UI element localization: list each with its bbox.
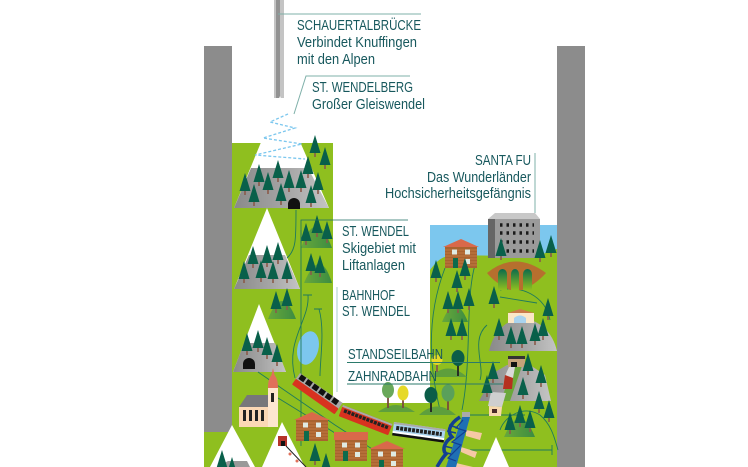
label: St. Wendelberg: ST. WENDELBERG bbox=[312, 79, 413, 96]
hill: trees near St. Wendel bbox=[300, 215, 332, 283]
label: Santa Fu bbox=[385, 152, 535, 213]
hill: small trees bbox=[268, 288, 296, 319]
label: Schauertalbrücke bbox=[278, 14, 421, 68]
trees: forest clearing bbox=[378, 350, 467, 415]
label: Santa Fu: Hochsicherheitsgefängnis bbox=[385, 185, 531, 202]
rail lines bbox=[258, 210, 558, 467]
mountain: funicular station bbox=[479, 353, 554, 422]
mountain: ski area bbox=[234, 208, 300, 289]
pillar: left bbox=[204, 46, 232, 432]
label: Zahnradbahn: ZAHNRADBAHN bbox=[348, 368, 437, 385]
houses bbox=[294, 412, 405, 467]
building: Santa Fu prison bbox=[488, 213, 540, 258]
label: Bahnhof St. Wendel bbox=[337, 287, 410, 392]
lake bbox=[294, 329, 322, 367]
label: Santa Fu: SANTA FU bbox=[475, 152, 531, 169]
bridge column bbox=[274, 0, 284, 98]
mountains: bottom bbox=[210, 422, 509, 467]
label: St. Wendel bbox=[301, 220, 417, 274]
trees: St. Wendelberg bbox=[240, 135, 330, 207]
label: Bahnhof St. Wendel: BAHNHOF bbox=[342, 287, 395, 304]
trees: Santa Fu area bbox=[430, 235, 556, 340]
hill: trees lower right bbox=[504, 405, 536, 437]
label: Bahnhof St. Wendel: ST. WENDEL bbox=[342, 303, 410, 320]
label: Santa Fu: Das Wunderländer bbox=[427, 169, 531, 186]
mountain: tunnel mountain bbox=[233, 304, 286, 372]
bridge: blue arch bridge bbox=[437, 412, 482, 467]
landscape: green base bbox=[204, 143, 557, 467]
label: Schauertalbrücke: SCHAUERTALBRÜCKE bbox=[297, 16, 421, 34]
label: Schauertalbrücke: mit den Alpen bbox=[297, 51, 375, 68]
label: Schauertalbrücke: Verbindet Knuffingen bbox=[297, 34, 417, 51]
label: St. Wendel: ST. WENDEL bbox=[342, 223, 409, 240]
label: Standseilbahn: STANDSEILBAHN bbox=[348, 346, 443, 363]
train: red 2 bbox=[339, 405, 392, 435]
label: St. Wendel: Skigebiet mit bbox=[342, 240, 417, 257]
pillar: right bbox=[557, 46, 585, 467]
viaduct bbox=[487, 262, 546, 290]
label: St. Wendelberg: Großer Gleiswendel bbox=[312, 96, 425, 113]
mountain: villa hill bbox=[489, 309, 557, 351]
label: St. Wendel: Liftanlagen bbox=[342, 257, 405, 274]
house: chalet bbox=[443, 239, 479, 268]
label: St. Wendelberg bbox=[294, 76, 425, 114]
mountain: St. Wendelberg bbox=[234, 96, 329, 209]
church bbox=[239, 368, 278, 427]
train: red 1 bbox=[292, 373, 343, 414]
train: blue bbox=[392, 422, 445, 443]
